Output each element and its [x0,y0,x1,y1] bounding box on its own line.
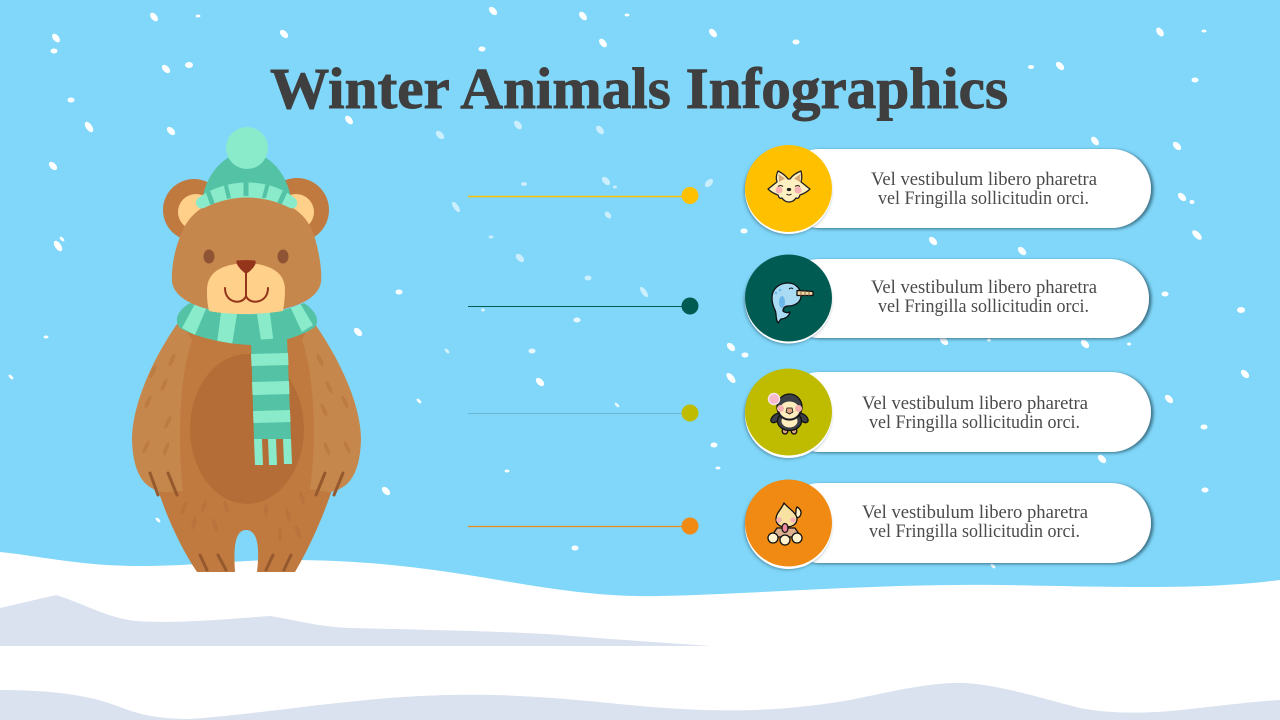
card 3 [780,372,1151,452]
card 1 text: Vel vestibulum libero pharetra [871,170,1097,190]
muzzle [207,263,285,314]
card 1 text [871,170,1097,209]
card 4 text: Vel vestibulum libero pharetra [862,503,1088,523]
icon: fox [768,171,810,202]
title: Winter Animals Infographics [270,56,1008,121]
bear ears [163,178,329,242]
icon: penguin [768,394,810,434]
card 2 text [871,278,1097,317]
connector 4 [468,518,698,534]
connector 1 [468,187,698,204]
hat [196,152,297,208]
fur marks [141,353,352,542]
icon: narwhal [772,283,813,323]
badge 1 [745,145,832,234]
card 1 text: vel Fringilla sollicitudin orci. [878,189,1089,209]
nose and mouth [225,260,268,302]
card 2 text: Vel vestibulum libero pharetra [871,278,1097,298]
icon: rabbit-like creature [768,503,802,545]
card 4 text [862,503,1088,542]
claws [150,473,343,570]
card 2 [780,259,1149,338]
badge 2 [745,254,832,344]
scarf wrap [177,300,317,346]
card 3 text [862,394,1088,433]
pompom [226,127,268,169]
connector 3 [468,404,698,422]
card 3 text: vel Fringilla sollicitudin orci. [869,413,1080,433]
card 2 text: vel Fringilla sollicitudin orci. [878,297,1089,317]
badge 3 [745,368,832,458]
bear arms [132,320,361,492]
scarf tail [251,338,292,465]
bear body [155,325,335,572]
card 4 text: vel Fringilla sollicitudin orci. [869,522,1080,542]
eyes [204,250,288,264]
snowflakes [8,5,1251,569]
snowy ground [0,552,1280,720]
bear head [172,197,321,313]
illustration: bear in winter hat and scarf [132,127,361,572]
bear belly [190,354,304,504]
card 4 [780,483,1151,563]
card 1 [780,149,1151,228]
badge 4 [745,480,832,569]
connector 2 [468,298,698,314]
card 3 text: Vel vestibulum libero pharetra [862,394,1088,414]
